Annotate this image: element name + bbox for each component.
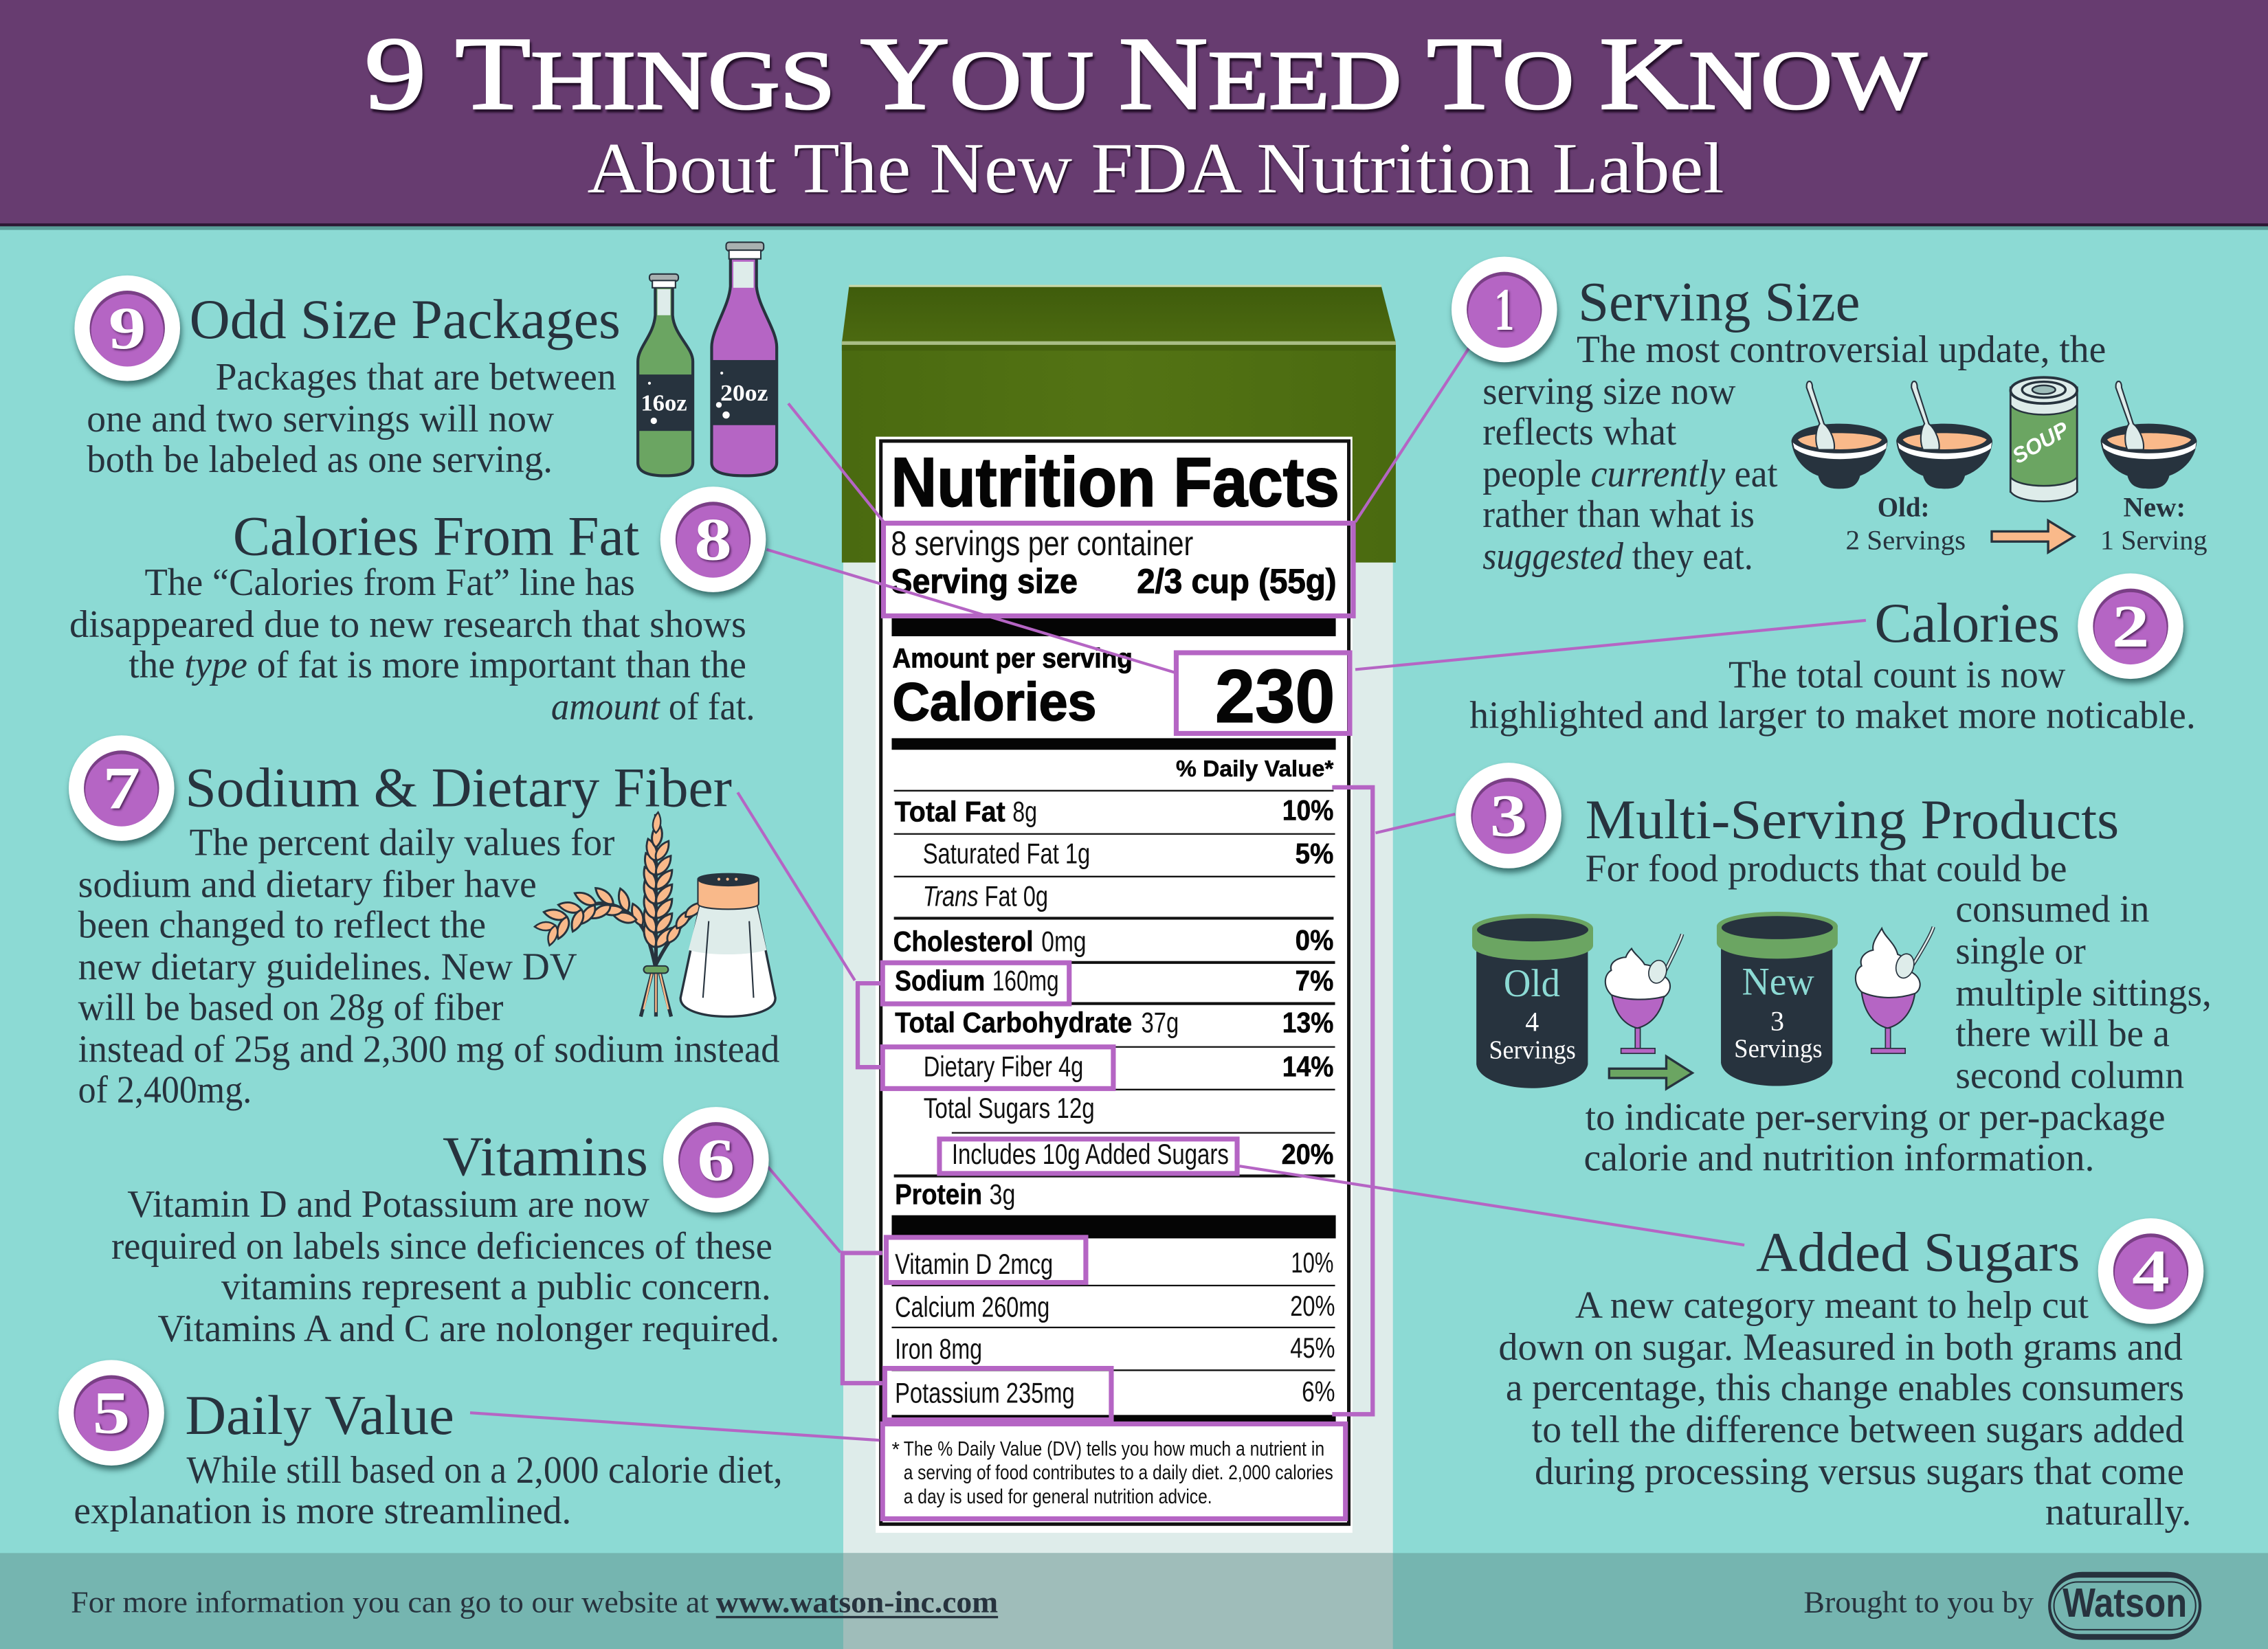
calories block: 230 [1215, 655, 1335, 739]
panel: daily value [58, 1360, 783, 1532]
dietary fiber row [924, 1050, 1333, 1082]
cholesterol row: 0mg [1041, 925, 1087, 957]
body text: will be based on 28g of fiber [78, 987, 504, 1029]
servings text [891, 524, 1337, 601]
label new: New: [2124, 491, 2186, 522]
body text: required on labels since deficiences of these [111, 1225, 772, 1268]
body text: new dietary guidelines. New DV [78, 946, 577, 989]
body text: While still based on a 2,000 calorie diet, [186, 1449, 783, 1492]
body text: naturally. [2045, 1491, 2191, 1534]
vitamin divider [891, 1215, 1336, 1238]
total sugars row: Total Sugars 12g [924, 1092, 1095, 1124]
badge 8: 8 [694, 506, 732, 573]
badge 1 [1452, 257, 1557, 362]
body text [1498, 1284, 2191, 1534]
heading: Added Sugars [1756, 1220, 2080, 1283]
footnote: a serving of food contributes to a daily diet. 2,000 calories [904, 1461, 1333, 1484]
body text: both be labeled as one serving. [87, 438, 553, 481]
icon: green 16oz bottle [637, 274, 693, 475]
panel: multi-serving products [1456, 763, 2212, 1179]
icon: soup bowl old 2 [1896, 381, 1992, 489]
potassium row: Potassium 235mg [895, 1376, 1075, 1409]
body text: amount of fat. [551, 686, 755, 728]
dietary fiber row: 14% [1282, 1050, 1333, 1082]
body text: Packages that are between [216, 356, 616, 399]
badge 2 [2078, 573, 2183, 679]
centre pale column [843, 550, 1393, 1649]
watson logo [2048, 1572, 2201, 1640]
trans fat row: Trans Fat 0g [923, 880, 1048, 912]
body text: second column [1955, 1054, 2184, 1097]
icon: sundae large [1856, 927, 1933, 1053]
nutrition facts label [876, 437, 1353, 1533]
sodium row: 7% [1296, 965, 1333, 997]
body text: during processing versus sugars that come [1535, 1450, 2184, 1493]
footer credit text: Brought to you by [1803, 1586, 2034, 1619]
bottom rule [891, 1415, 1336, 1423]
heading: Calories From Fat [233, 505, 639, 568]
badge 5: 5 [93, 1380, 130, 1447]
label new [2100, 491, 2208, 556]
icon: soup bowl new [2100, 381, 2197, 489]
cholesterol row: Cholesterol [893, 925, 1034, 957]
total fat row: 10% [1282, 794, 1333, 826]
label new: 1 Serving [2100, 525, 2208, 556]
badge 2: 2 [2112, 593, 2149, 660]
vitamin d row: Vitamin D 2mcg [895, 1248, 1053, 1280]
heading: Calories [1875, 592, 2060, 654]
badge 5 [58, 1360, 164, 1466]
body text: highlighted and larger to maket more noticable. [1469, 694, 2196, 737]
footnote: The % Daily Value (DV) tells you how much a nutrient in [904, 1438, 1324, 1461]
total fat row: Total Fat [895, 795, 1005, 827]
body text: The percent daily values for [190, 822, 615, 864]
body text: down on sugar. Measured in both grams and [1498, 1326, 2183, 1369]
icon: salt shaker [680, 873, 775, 1017]
saturated fat row [923, 837, 1333, 869]
added sugars row: 20% [1282, 1138, 1333, 1170]
body text: suggested they eat. [1482, 535, 1753, 578]
badge 4: 4 [2132, 1237, 2170, 1305]
icon: purple 20oz bottle [711, 243, 777, 475]
icon: green 16oz bottle: 16oz [641, 391, 687, 416]
body text: sodium and dietary fiber have [78, 864, 537, 906]
body text [111, 1183, 779, 1350]
body text: single or [1955, 930, 2086, 973]
saturated fat row: Saturated Fat 1g [923, 837, 1090, 869]
body text: disappeared due to new research that shows [69, 603, 746, 646]
footer band [0, 1553, 2268, 1649]
badge 1: 1 [1494, 276, 1515, 344]
icon: new tub 3 servings [1717, 912, 1838, 1086]
body text: rather than what is [1482, 493, 1755, 536]
badge 7: 7 [102, 754, 140, 822]
heading: Multi-Serving Products [1586, 788, 2119, 851]
total carbohydrate row: 13% [1282, 1007, 1333, 1039]
icon: old tub 4 servings: Old [1504, 962, 1560, 1005]
body text: Vitamin D and Potassium are now [127, 1183, 650, 1226]
protein row: 3g [990, 1178, 1015, 1210]
protein row: Protein [895, 1178, 982, 1210]
icon: new tub 3 servings: Servings [1734, 1034, 1823, 1063]
watson logo: Watson [2063, 1581, 2187, 1626]
body text: to tell the difference between sugars added [1532, 1409, 2184, 1451]
total fat row: 8g [1012, 795, 1037, 827]
cholesterol row [893, 924, 1333, 957]
body text: there will be a [1955, 1012, 2170, 1055]
body text [78, 822, 779, 1112]
body text: For food products that could be [1586, 848, 2067, 890]
body text: serving size now [1482, 370, 1736, 413]
body text: one and two servings will now [87, 398, 555, 440]
connector brackets [843, 787, 1372, 1414]
body text: consumed in [1955, 888, 2150, 930]
iron row [895, 1332, 1335, 1365]
iron row: Iron 8mg [895, 1332, 982, 1365]
servings text: 2/3 cup (55g) [1137, 561, 1337, 601]
label old: Old: [1878, 491, 1930, 522]
vitamin d row: 10% [1291, 1246, 1333, 1279]
arrow [1992, 521, 2074, 552]
total carbohydrate row [895, 1007, 1333, 1039]
badge 8 [660, 486, 766, 592]
panel: vitamins [111, 1107, 779, 1350]
servings text: 8 servings per container [891, 524, 1193, 563]
arrow [1609, 1056, 1692, 1089]
iron row: 45% [1290, 1332, 1335, 1364]
body text: The most controversial update, the [1577, 328, 2106, 371]
body text: The total count is now [1728, 654, 2066, 697]
badge 9: 9 [109, 295, 146, 362]
body text: calorie and nutrition information. [1584, 1136, 2094, 1179]
body text [1482, 328, 2106, 578]
footer website text [71, 1586, 998, 1619]
panel: calories [1469, 573, 2196, 737]
potassium row [895, 1375, 1335, 1409]
icon: old tub 4 servings [1472, 914, 1593, 1088]
icon: new tub 3 servings: New [1742, 960, 1814, 1003]
calcium row: 20% [1290, 1290, 1335, 1322]
panel: calories from fat [69, 486, 766, 728]
icon: soup can [2008, 377, 2077, 502]
sodium row: Sodium [895, 965, 985, 997]
vitamin d row [895, 1246, 1333, 1280]
label title: Nutrition Facts [891, 445, 1339, 521]
footnote: a day is used for general nutrition advice. [904, 1485, 1212, 1508]
potassium row: 6% [1302, 1375, 1335, 1407]
sodium row [895, 965, 1333, 997]
badge 6 [663, 1107, 769, 1213]
calories block: Calories [893, 672, 1096, 732]
icon: old tub 4 servings: Servings [1489, 1036, 1576, 1065]
rule [891, 738, 1336, 750]
body text: instead of 25g and 2,300 mg of sodium instead [78, 1029, 779, 1071]
panel: added sugars [1498, 1218, 2203, 1534]
thick rule [891, 618, 1336, 636]
heading: Daily Value [185, 1384, 454, 1446]
heading: Odd Size Packages [190, 288, 621, 350]
body text: vitamins represent a public concern. [221, 1266, 771, 1308]
body text: a percentage, this change enables consumers [1506, 1367, 2184, 1409]
body text: the type of fat is more important than the [129, 644, 746, 686]
calcium row: Calcium 260mg [895, 1290, 1049, 1323]
cholesterol row: 0% [1296, 924, 1333, 956]
badge 7 [69, 735, 175, 841]
body text: A new category meant to help cut [1575, 1284, 2089, 1327]
panel: serving size [1452, 257, 2208, 578]
subtitle: About The New FDA Nutrition Label [587, 128, 1724, 208]
body text [1469, 654, 2196, 737]
footnote: * [891, 1438, 900, 1461]
body text: been changed to reflect the [78, 904, 486, 947]
body text: The “Calories from Fat” line has [144, 561, 635, 604]
body text [1584, 848, 2212, 1179]
icon: soup can: SOUP [2008, 416, 2074, 469]
footnote [891, 1438, 1333, 1508]
calories block [893, 643, 1335, 739]
icon: wheat bundle [534, 812, 706, 1017]
food box illustration [842, 285, 1396, 563]
title: 9 T HINGS Y OU N EED T O K NOW [364, 16, 1926, 131]
footer website text: www.watson-inc.com [716, 1586, 998, 1619]
icon: soup bowl old 1 [1792, 381, 1887, 489]
body text [74, 1449, 783, 1532]
dietary fiber row: Dietary Fiber 4g [924, 1050, 1083, 1082]
daily value header: % Daily Value* [1176, 756, 1334, 782]
calories block: Amount per serving [893, 643, 1133, 673]
body text: reflects what [1482, 411, 1677, 453]
total fat row [895, 794, 1333, 827]
added sugars row: Includes 10g Added Sugars [952, 1138, 1229, 1170]
saturated fat row: 5% [1296, 837, 1333, 869]
sodium row: 160mg [992, 965, 1059, 997]
body text: multiple sittings, [1955, 972, 2212, 1015]
servings text: Serving size [891, 561, 1078, 601]
badge 6: 6 [697, 1126, 735, 1193]
badge 3 [1456, 763, 1561, 868]
body text: Vitamins A and C are nolonger required. [157, 1308, 779, 1350]
body text: people currently eat [1482, 453, 1778, 495]
icon: new tub 3 servings: 3 [1770, 1006, 1784, 1037]
calcium row [895, 1290, 1335, 1323]
label old [1845, 491, 1966, 556]
icon: sundae small [1605, 934, 1682, 1053]
panel: sodium and dietary fiber [69, 735, 779, 1112]
body text [69, 561, 755, 728]
heading: Serving Size [1578, 271, 1860, 333]
badge 3: 3 [1490, 782, 1527, 849]
badge 4 [2098, 1218, 2203, 1324]
heading: Sodium & Dietary Fiber [185, 756, 732, 819]
total carbohydrate row: 37g [1142, 1007, 1179, 1039]
body text: of 2,400mg. [78, 1069, 252, 1112]
total carbohydrate row: Total Carbohydrate [895, 1007, 1132, 1039]
header band [0, 0, 2268, 230]
body text: to indicate per-serving or per-package [1586, 1097, 2166, 1139]
body text: explanation is more streamlined. [74, 1490, 571, 1532]
label old: 2 Servings [1845, 525, 1966, 556]
heading: Vitamins [443, 1125, 648, 1187]
icon: old tub 4 servings: 4 [1525, 1007, 1539, 1037]
panel: odd size packages [74, 243, 777, 481]
body text [87, 356, 616, 481]
highlight boxes [882, 523, 1353, 1518]
icon: purple 20oz bottle: 20oz [720, 381, 768, 406]
connector lines [470, 347, 1866, 1440]
badge 9 [74, 276, 180, 381]
footer website text: For more information you can go to our website at [71, 1586, 709, 1619]
